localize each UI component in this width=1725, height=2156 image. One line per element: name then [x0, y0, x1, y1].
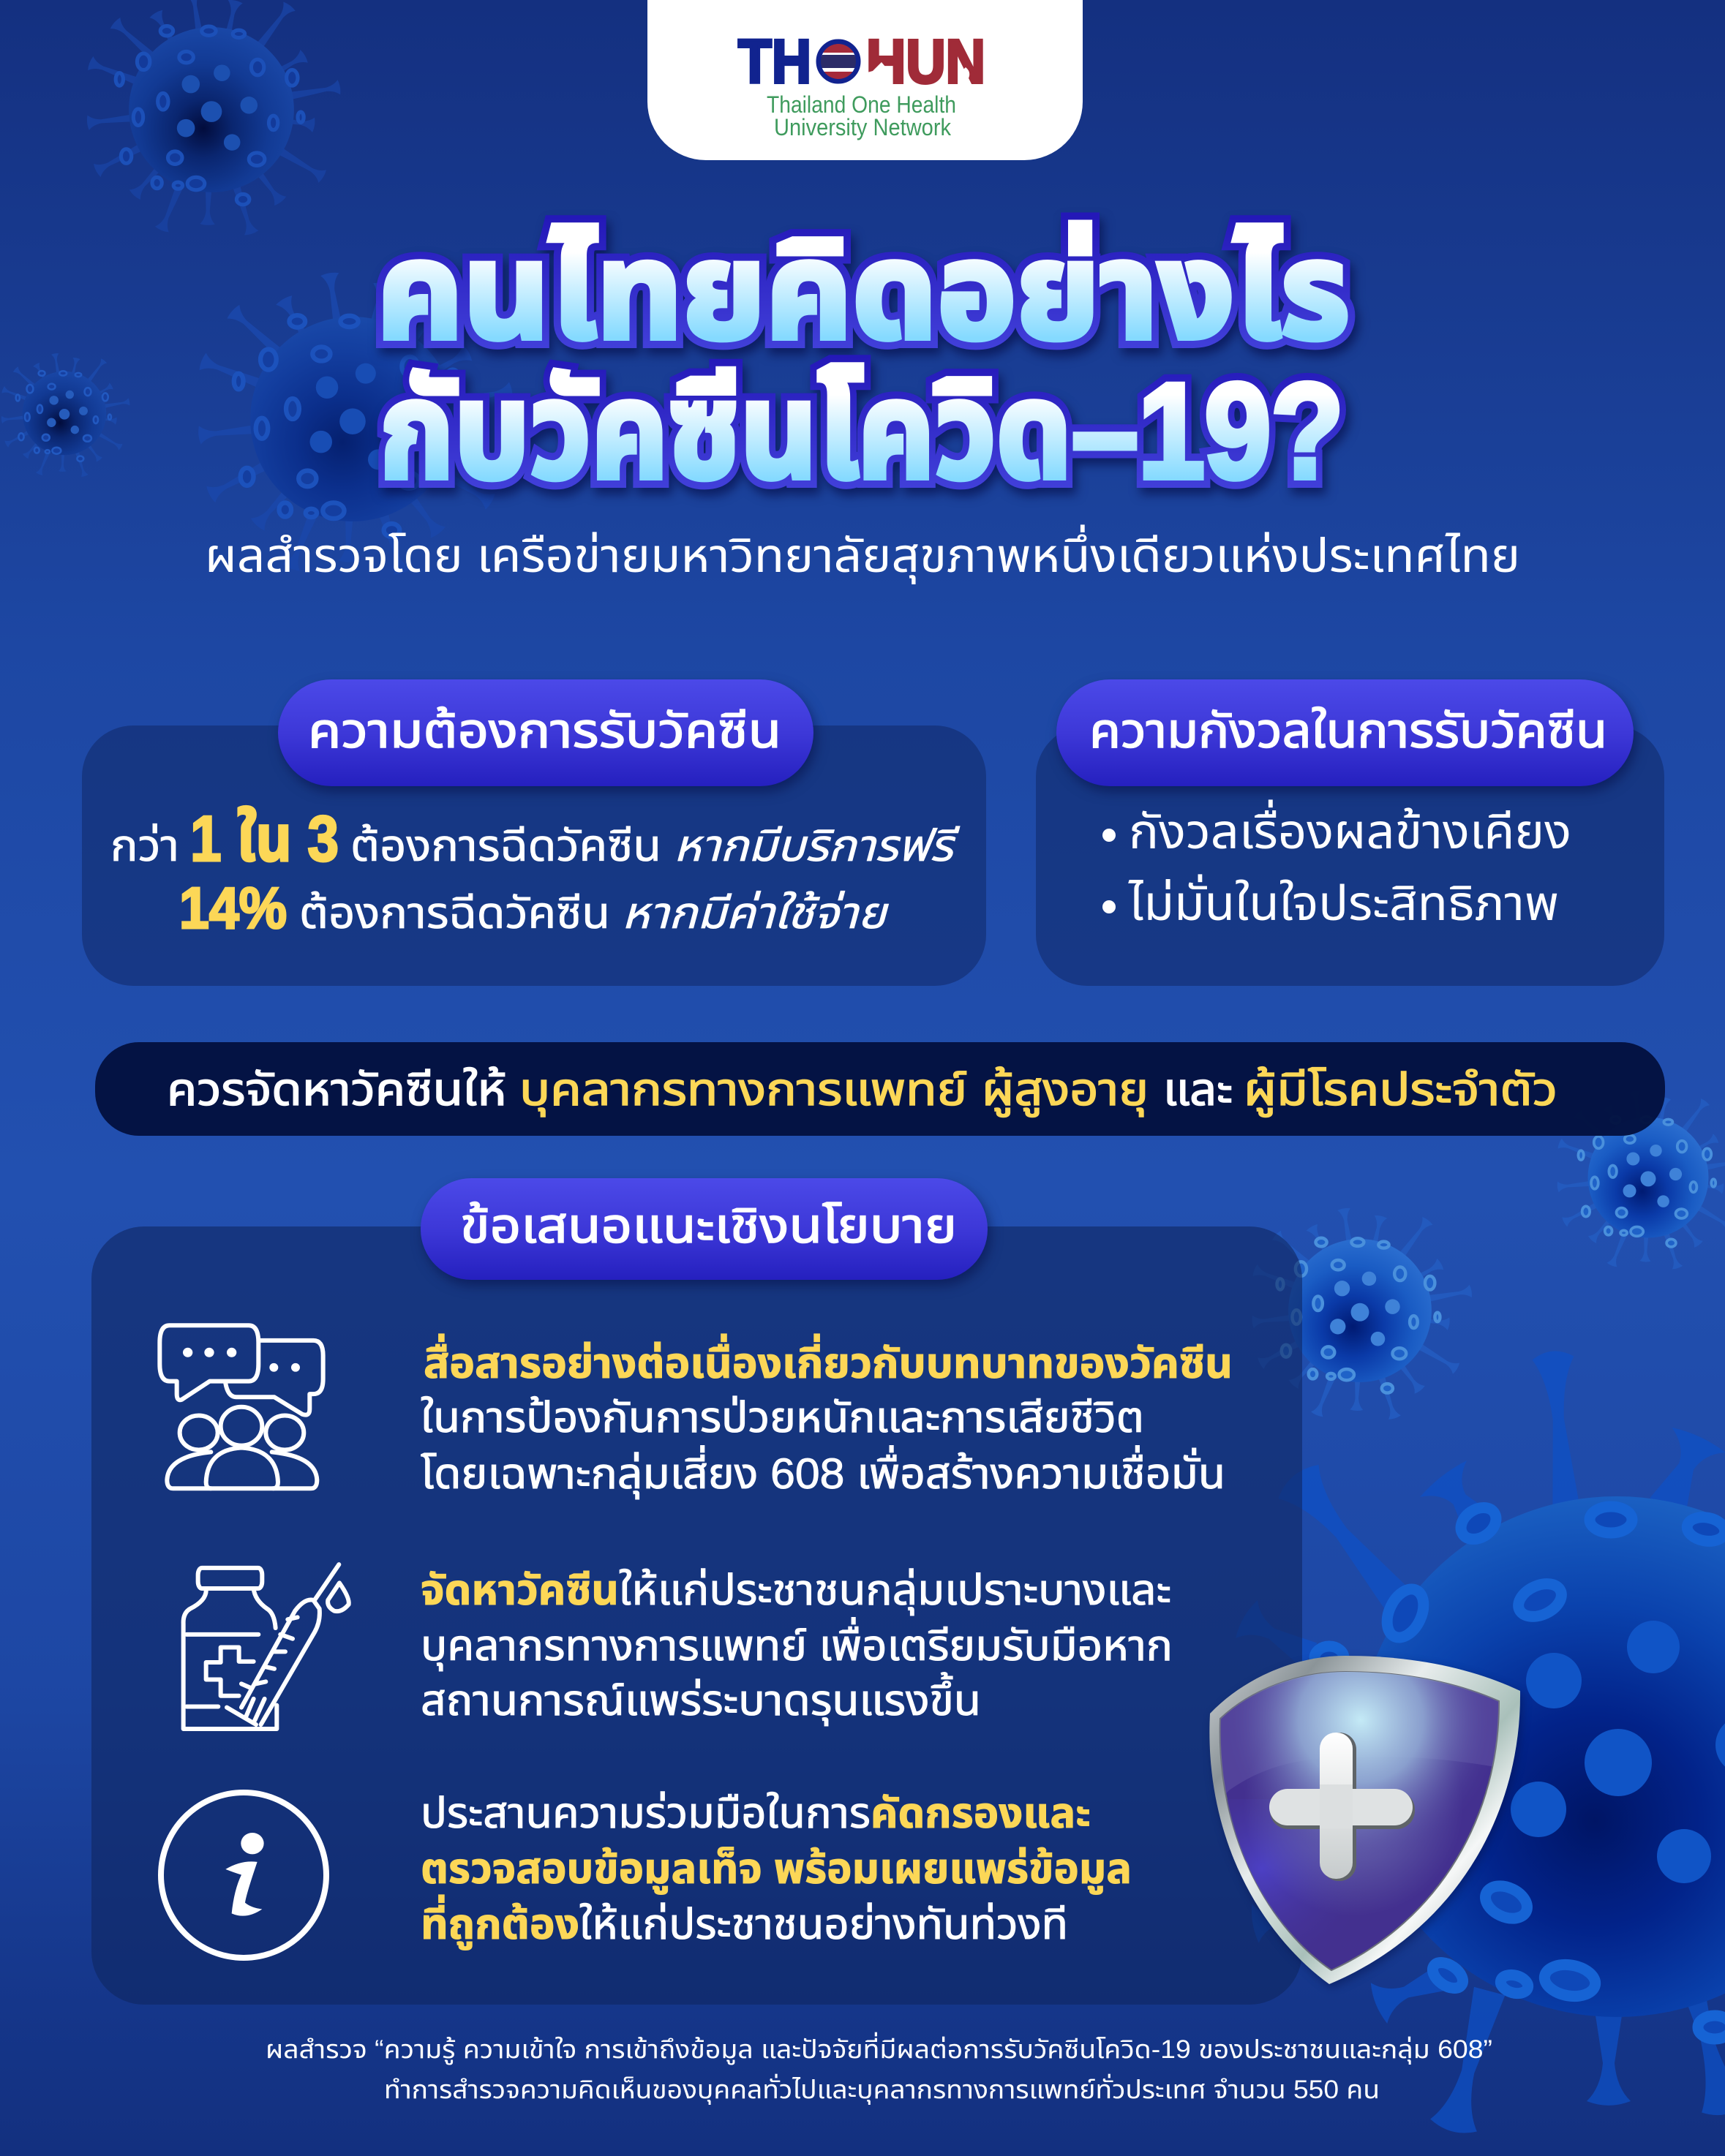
pill heading: vaccine concerns: ความกังวลในการรับวัคซีน	[1089, 704, 1607, 758]
concern bullet two: ไม่มั่นในใจประสิทธิภาพ	[1128, 874, 1559, 930]
demand line one: กว่า	[110, 821, 179, 870]
subtitle: ผลสำรวจโดย เครือข่ายมหาวิทยาลัยสุขภาพหนึ่งเดียวแห่งประเทศไทย	[205, 524, 1520, 584]
text: screen and verify information: ตรวจสอบข้อมูลเท็จ พร้อมเผยแพร่ข้อมูล	[421, 1845, 1132, 1895]
footnote: ทำการสำรวจความคิดเห็นของบุคคลทั่วไปและบุคลากรทางการแพทย์ทั่วประเทศ จำนวน 550 คน	[384, 2073, 1380, 2105]
logo panel	[647, 0, 1083, 160]
logo tagline: University Network	[774, 114, 952, 140]
text: procure vaccines: ให้แก่ประชาชนกลุ่มเปราะบางและ	[619, 1567, 1171, 1616]
text: screen and verify information: ที่ถูกต้อง	[421, 1894, 579, 1950]
text: procure vaccines	[421, 1567, 1173, 1726]
title: คนไทยคิดอย่างไร	[377, 216, 1350, 367]
text: screen and verify information: ประสานความร่วมมือในการ	[421, 1790, 871, 1837]
text: communicate about vaccines: สื่อสารอย่างต่อเนื่องเกี่ยวกับบทบาทของวัคซีน	[424, 1333, 1233, 1387]
icon: vaccine vial and syringe	[184, 1564, 349, 1729]
text: screen and verify information: ให้แก่ประชาชนอย่างทันท่วงที	[579, 1901, 1068, 1948]
recommendation banner: และ	[1163, 1065, 1233, 1115]
plus sign	[1269, 1733, 1415, 1881]
concern bullet one: กังวลเรื่องผลข้างเคียง	[1129, 799, 1571, 859]
demand line one	[110, 802, 961, 875]
virus: small left	[1, 353, 130, 478]
virus: right upper	[1557, 1090, 1725, 1270]
icon: shield with plus	[1209, 1654, 1526, 1989]
logo wordmark: TH	[738, 27, 811, 96]
title: กับวัคซีนโควิด–19?	[380, 356, 1344, 507]
text: screen and verify information	[421, 1790, 1132, 1950]
text: procure vaccines: บุคลากรทางการแพทย์ เพื่อเตรียมรับมือหาก	[421, 1617, 1173, 1671]
recommendation banner: ผู้สูงอายุ	[982, 1065, 1149, 1117]
text: procure vaccines: จัดหาวัคซีน	[421, 1567, 619, 1614]
demand line one: ต้องการฉีดวัคซีน	[350, 821, 661, 870]
text: communicate about vaccines: ในการป้องกันการป่วยหนักและการเสียชีวิต	[421, 1394, 1144, 1441]
demand line two: 14%	[179, 875, 287, 941]
logo tagline: Thailand One Health	[767, 91, 956, 118]
recommendation banner: ควรจัดหาวัคซีนให้	[167, 1065, 506, 1115]
text: screen and verify information: คัดกรองและ	[871, 1790, 1091, 1837]
panel: vaccine concerns	[1036, 679, 1664, 986]
title: คนไทยคิดอย่างไร	[377, 216, 1350, 367]
recommendation banner: บุคลากรทางการแพทย์	[519, 1065, 967, 1117]
recommendation banner: ผู้มีโรคประจำตัว	[1244, 1065, 1557, 1117]
logo wordmark	[737, 38, 983, 85]
virus: top left	[86, 0, 342, 236]
footnote: ผลสำรวจ “ความรู้ ความเข้าใจ การเข้าถึงข้อมูล และปัจจัยที่มีผลต่อการรับวัคซีนโควิด-19 ของประชาชนและกลุ่ม 608”	[266, 2032, 1492, 2065]
virus: right middle	[1252, 1207, 1473, 1420]
pill heading: policy recommendations: ข้อเสนอแนะเชิงนโยบาย	[460, 1199, 957, 1253]
icon: chat and people	[159, 1325, 323, 1488]
footnote	[266, 2032, 1492, 2105]
text: communicate about vaccines	[421, 1333, 1233, 1499]
virus: behind title	[198, 271, 514, 576]
pill heading: vaccine demand	[278, 679, 813, 786]
demand line two: ต้องการฉีดวัคซีน	[299, 889, 610, 938]
recommendation banner	[95, 1042, 1665, 1136]
demand line two: หากมีค่าใช้จ่าย	[622, 889, 889, 938]
panel: policy recommendations	[91, 1178, 1302, 2005]
icon: information	[161, 1793, 326, 1958]
demand line one: 1 ใน 3	[190, 802, 339, 875]
demand line one: หากมีบริการฟรี	[674, 821, 961, 870]
text: communicate about vaccines: โดยเฉพาะกลุ่มเสี่ยง 608 เพื่อสร้างความเชื่อมั่น	[421, 1445, 1225, 1499]
panel: vaccine demand	[82, 679, 986, 986]
logo wordmark: HUN	[866, 27, 985, 96]
title	[377, 216, 1350, 507]
pill heading: vaccine concerns	[1056, 679, 1634, 786]
text: procure vaccines: สถานการณ์แพร่ระบาดรุนแรงขึ้น	[421, 1672, 981, 1726]
logo tagline	[767, 91, 956, 140]
demand line two	[179, 875, 889, 941]
title: กับวัคซีนโควิด–19?	[380, 356, 1344, 507]
pill heading: policy recommendations	[421, 1178, 988, 1280]
pill heading: vaccine demand: ความต้องการรับวัคซีน	[308, 704, 781, 758]
virus: large bottom right	[1233, 1349, 1725, 2138]
